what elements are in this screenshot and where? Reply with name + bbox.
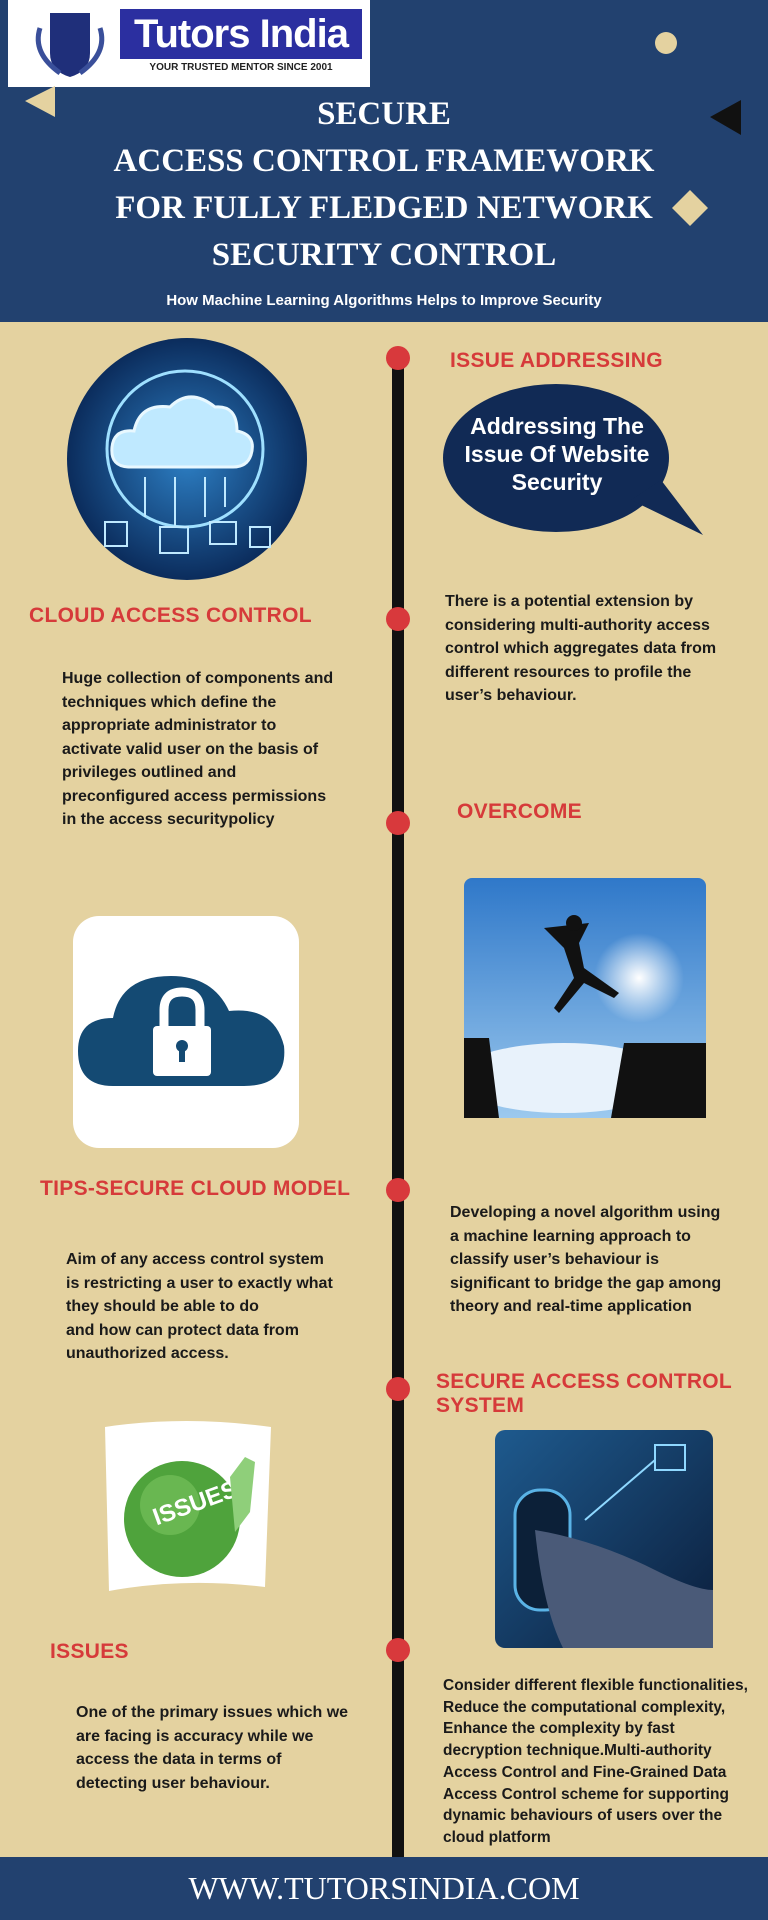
text: issues: detecting user behaviour. <box>76 1774 270 1792</box>
text: secure access control system <box>443 1677 748 1846</box>
icon: speech bubble: Security <box>512 469 602 495</box>
heading: secure access control system: SECURE ACCESS CONTROL <box>436 1370 732 1393</box>
title <box>114 96 654 273</box>
text: secure access control system: Reduce the computational complexity, <box>443 1699 725 1716</box>
heading: issues: ISSUES <box>50 1640 129 1663</box>
text: secure access control system: Consider different flexible functionalities, <box>443 1677 748 1694</box>
text: cloud access control: preconfigured access permissions <box>62 788 326 804</box>
image: issues ball <box>105 1421 271 1591</box>
icon: cloud network circle <box>67 338 307 580</box>
header band <box>0 0 768 322</box>
heading: secure access control system: SYSTEM <box>436 1394 524 1417</box>
text: tips: and how can protect data from <box>66 1322 299 1338</box>
text: issues: One of the primary issues which we <box>76 1704 348 1721</box>
text: cloud access control: appropriate administrator to <box>62 717 276 734</box>
footer <box>0 1857 768 1920</box>
heading: secure access control system <box>436 1370 732 1417</box>
text: secure access control system: Access Control scheme for supporting <box>443 1786 729 1803</box>
heading: cloud access control: CLOUD ACCESS CONTROL <box>29 604 312 627</box>
title: ACCESS CONTROL FRAMEWORK <box>114 143 654 179</box>
text: cloud access control: privileges outlined and <box>62 764 236 781</box>
text: secure access control system: dynamic behaviours of users over the <box>443 1807 722 1824</box>
image: fingerprint scanner <box>495 1430 713 1648</box>
text: cloud access control: Huge collection of components and <box>62 670 333 687</box>
image: issues ball: ISSUES <box>149 1476 241 1531</box>
logo <box>8 0 370 87</box>
text: tips <box>66 1251 333 1362</box>
subtitle: How Machine Learning Algorithms Helps to Improve Security <box>166 292 602 309</box>
text: cloud access control: in the access securitypolicy <box>62 811 275 828</box>
text: issues: access the data in terms of <box>76 1751 281 1768</box>
title: SECURE <box>317 96 451 132</box>
text: secure access control system: Enhance the complexity by fast <box>443 1720 675 1737</box>
decorations <box>25 32 741 226</box>
text: secure access control system: cloud platform <box>443 1829 551 1846</box>
icon: lock cloud <box>73 916 299 1148</box>
footer url: WWW.TUTORSINDIA.COM <box>188 1870 580 1906</box>
logo: YOUR TRUSTED MENTOR SINCE 2001 <box>149 62 333 73</box>
text: secure access control system: Access Control and Fine-Grained Data <box>443 1764 726 1781</box>
icon: speech bubble: Addressing The <box>470 413 644 439</box>
heading: issue addressing: ISSUE ADDRESSING <box>450 349 663 372</box>
text: overcome: significant to bridge the gap among <box>450 1274 721 1292</box>
title: FOR FULLY FLEDGED NETWORK <box>115 190 653 226</box>
text: tips: is restricting a user to exactly what <box>66 1274 333 1292</box>
timeline line <box>392 358 404 1858</box>
image: overcome jump <box>464 878 706 1118</box>
title: SECURITY CONTROL <box>212 237 556 273</box>
icon: speech bubble: Issue Of Website <box>465 441 649 467</box>
text: cloud access control: activate valid user on the basis of <box>62 740 318 758</box>
text: overcome <box>450 1204 721 1315</box>
text: issue addressing: different resources to profile the <box>445 664 691 680</box>
text: issue addressing <box>445 593 716 704</box>
text: issues <box>76 1704 348 1792</box>
heading: overcome: OVERCOME <box>457 800 582 823</box>
text: secure access control system: decryption technique.Multi-authority <box>443 1742 712 1759</box>
icon: speech bubble <box>443 384 703 535</box>
text: tips: they should be able to do <box>66 1298 259 1315</box>
text: issue addressing: control which aggregates data from <box>445 640 716 657</box>
text: cloud access control: techniques which define the <box>62 694 276 710</box>
text: tips: unauthorized access. <box>66 1345 229 1362</box>
text: overcome: classify user’s behaviour is <box>450 1251 659 1268</box>
text: issue addressing: considering multi-authority access <box>445 616 710 634</box>
text: tips: Aim of any access control system <box>66 1251 324 1268</box>
text: issue addressing: user’s behaviour. <box>445 687 577 704</box>
dots <box>386 346 410 370</box>
logo text: Tutors India <box>134 12 348 56</box>
heading: tips secure cloud model: TIPS-SECURE CLOUD MODEL <box>40 1177 350 1200</box>
text: overcome: a machine learning approach to <box>450 1228 691 1244</box>
text: cloud access control <box>62 670 333 828</box>
text: issues: are facing is accuracy while we <box>76 1728 313 1744</box>
text: overcome: theory and real-time application <box>450 1298 692 1315</box>
text: overcome: Developing a novel algorithm using <box>450 1204 720 1221</box>
logo shield <box>36 13 104 77</box>
text: issue addressing: There is a potential extension by <box>445 593 693 610</box>
